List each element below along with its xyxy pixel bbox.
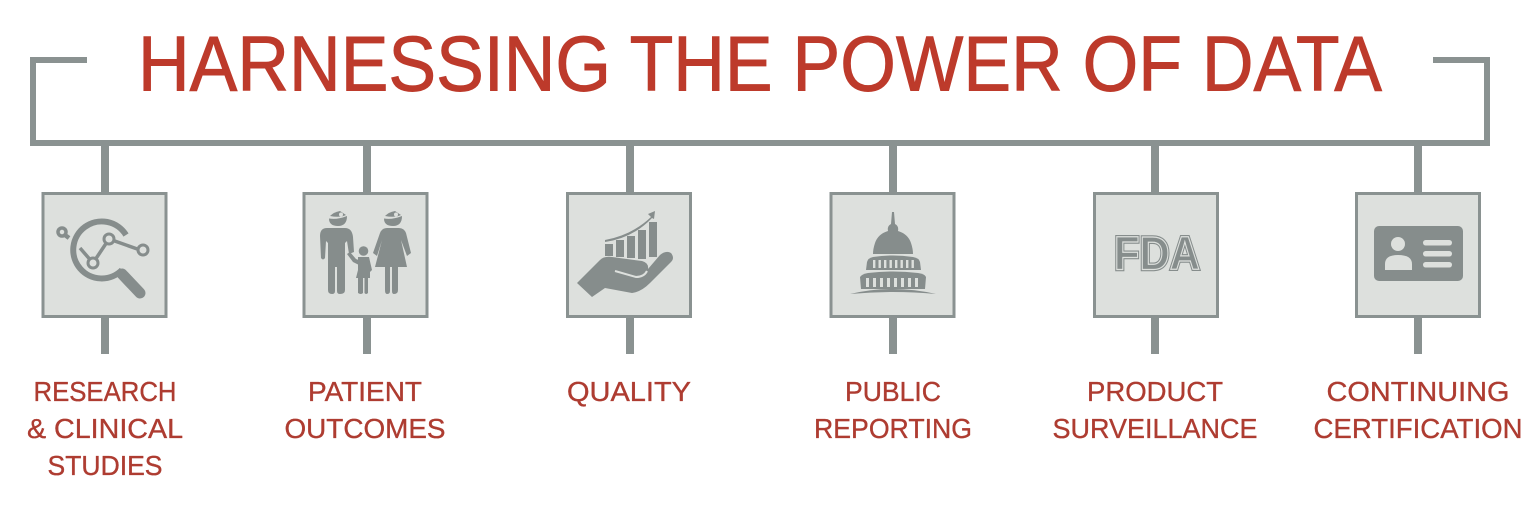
- icon: FDA logo: FDA: [1114, 226, 1200, 280]
- label: public reporting: PUBLIC: [845, 376, 941, 407]
- panel: patient outcomes: [304, 194, 427, 316]
- icon: ID card: [1374, 226, 1463, 281]
- panel: continuing certification: [1356, 194, 1480, 316]
- title: HARNESSING THE POWER OF DATA: [138, 20, 1382, 108]
- label: quality: QUALITY: [567, 376, 691, 407]
- label: patient outcomes: OUTCOMES: [284, 413, 446, 444]
- icon: capitol dome: [850, 212, 936, 294]
- label: public reporting: REPORTING: [814, 413, 972, 444]
- panel: research and clinical studies: [43, 194, 166, 316]
- label: research and clinical studies: & CLINICAL: [27, 413, 183, 444]
- stems: [101, 145, 1422, 354]
- label: patient outcomes: PATIENT: [308, 376, 422, 407]
- icon: hand holding bar chart: [577, 211, 673, 297]
- label: research and clinical studies: STUDIES: [48, 450, 162, 481]
- panel: product surveillance: [1094, 194, 1218, 316]
- label: product surveillance: PRODUCT: [1087, 376, 1223, 407]
- icon: magnifier with chart: [58, 221, 148, 293]
- icon: FDA logo: FDA: [1114, 226, 1200, 280]
- label: research and clinical studies: RESEARCH: [34, 376, 176, 407]
- panel: quality: [568, 194, 690, 316]
- icon: family: [320, 211, 411, 294]
- label: continuing certification: CERTIFICATION: [1314, 413, 1522, 444]
- label: continuing certification: CONTINUING: [1326, 376, 1510, 407]
- bracket connector: [33, 60, 1487, 143]
- panel: public reporting: [831, 194, 954, 316]
- label: product surveillance: SURVEILLANCE: [1052, 413, 1258, 444]
